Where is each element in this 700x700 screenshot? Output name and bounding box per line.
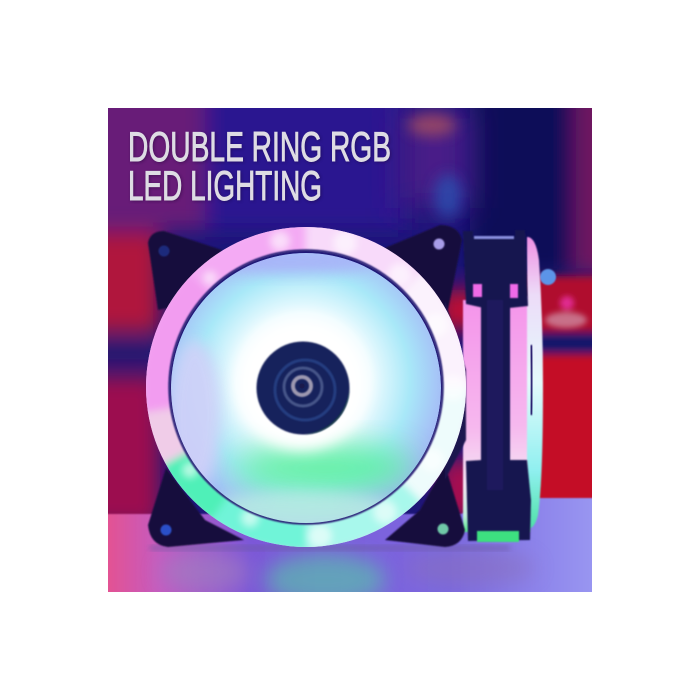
rear fan pink windows: [473, 284, 482, 297]
rear fan top highlight: [474, 236, 514, 239]
inner ring dark edge: [170, 250, 442, 524]
rear fan side view: [463, 230, 543, 542]
white centre glow: [236, 318, 368, 450]
title shadow: DOUBLE RING RGB: [129, 124, 392, 171]
green lower glow: [235, 444, 415, 492]
rear fan outer ring edge: [527, 237, 543, 528]
rear fan green glow: [477, 531, 519, 542]
blurred ornament on back shelf: [545, 296, 587, 328]
table surface: [108, 497, 592, 592]
rear fan centre column shade: [487, 300, 503, 490]
fan blades glow: [169, 250, 441, 532]
ring hot spots: [182, 231, 466, 548]
ring colour arcs: [158, 239, 454, 535]
front fan frame with corner mounts: [148, 225, 466, 547]
background: blurred room: [108, 108, 592, 516]
outer LED ring glow: [140, 220, 470, 555]
rear fan glow strips: [463, 300, 483, 532]
blue round bokeh: [540, 269, 556, 285]
title shadow: LED LIGHTING: [129, 163, 323, 210]
hub: [256, 342, 350, 434]
lilac left glow: [169, 340, 221, 490]
title shadow: [129, 124, 392, 210]
rear fan frame body: [463, 230, 531, 541]
title line 2: LED LIGHTING: [128, 162, 322, 209]
pale green bottom: [222, 486, 388, 523]
product photo infographic: [108, 108, 592, 592]
top lilac glow: [205, 250, 375, 274]
title: [128, 123, 392, 210]
title line 1: DOUBLE RING RGB: [128, 123, 391, 170]
mounting holes: [158, 238, 448, 536]
